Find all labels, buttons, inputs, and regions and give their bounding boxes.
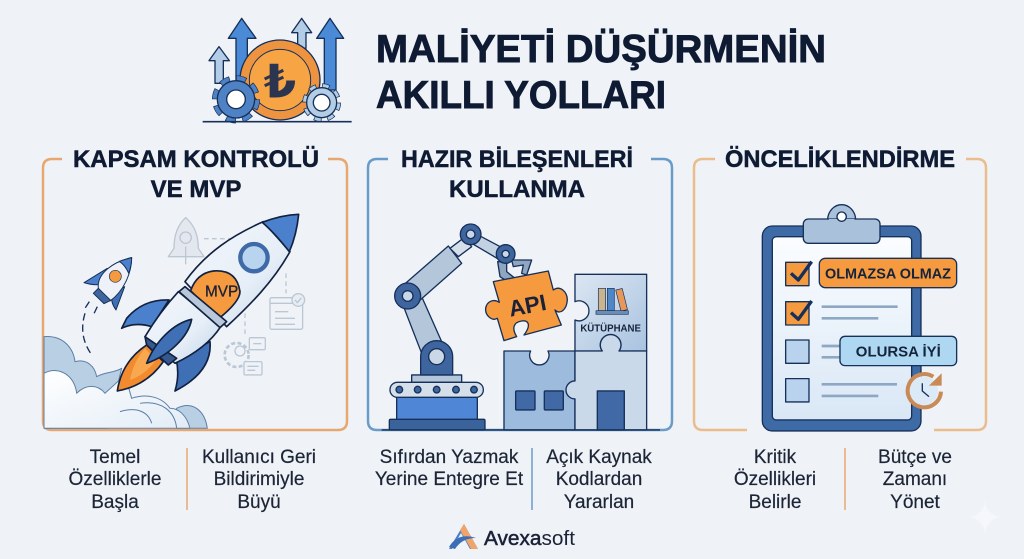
caption: butce ve zaman: Yönet bbox=[890, 492, 941, 513]
title: MALİYETİ DÜŞÜRMENİN bbox=[376, 28, 826, 71]
caption: acik kaynak: Açık Kaynak bbox=[546, 447, 652, 468]
illustration: robot arm and puzzle bbox=[382, 224, 660, 430]
badge: olursa iyi: OLURSA İYİ bbox=[856, 344, 941, 361]
icon: clouds bbox=[44, 337, 207, 428]
caption: temel ozellikler: Özelliklerle bbox=[69, 469, 161, 490]
title: AKILLI YOLLARI bbox=[376, 74, 666, 117]
caption: butce ve zaman: Zamanı bbox=[883, 469, 947, 490]
header icon: coin, gears and arrows: ₺ bbox=[264, 55, 296, 109]
icon: API puzzle piece: API bbox=[506, 289, 548, 322]
heading: kapsam: KAPSAM KONTROLÜ bbox=[73, 146, 319, 173]
illustration: rocket launch bbox=[44, 214, 305, 428]
icon: main rocket bbox=[117, 214, 299, 391]
heading: kapsam: VE MVP bbox=[151, 176, 241, 203]
caption: entegre et: Yerine Entegre Et bbox=[375, 469, 524, 490]
logo: avexasoft: Avexasoft bbox=[484, 528, 575, 550]
caption: entegre et: Sıfırdan Yazmak bbox=[380, 447, 519, 468]
caption: kritik ozellikler: Özellikleri bbox=[734, 469, 816, 490]
heading: hazir bilesenleri bbox=[401, 146, 633, 203]
icon: puzzle blocks bbox=[504, 274, 647, 430]
caption: kullanici geri bildirimi: Büyü bbox=[237, 492, 281, 513]
logo: avexasoft bbox=[449, 524, 575, 550]
icon: faint feature sketches bbox=[168, 218, 305, 375]
icon: empty boxes bbox=[786, 340, 809, 402]
icon: sparkle bbox=[969, 501, 1001, 533]
icon: clipboard clip bbox=[803, 205, 880, 243]
icon: API puzzle piece bbox=[486, 271, 567, 341]
caption: temel ozellikler: Temel bbox=[90, 447, 140, 468]
caption: acik kaynak: Kodlardan bbox=[556, 469, 642, 490]
label: kutuphane: KÜTÜPHANE bbox=[580, 323, 642, 334]
panel: onceliklendirme bbox=[694, 146, 986, 513]
icon: robot arm bbox=[389, 224, 532, 430]
caption: kritik ozellikler: Kritik bbox=[754, 447, 797, 468]
heading: onceliklendirme: ÖNCELİKLENDİRME bbox=[725, 146, 955, 173]
panel: hazir bilesenleri kullanma bbox=[368, 146, 672, 513]
caption: butce ve zaman: Bütçe ve bbox=[878, 447, 952, 468]
icon: checked boxes bbox=[786, 262, 812, 325]
icon: main rocket: MVP bbox=[205, 284, 238, 301]
caption: acik kaynak: Yararlan bbox=[564, 492, 634, 513]
caption: temel ozellikler: Başla bbox=[91, 492, 139, 513]
icon: clock bbox=[908, 373, 942, 407]
panel: kapsam kontrolu ve MVP bbox=[43, 146, 347, 513]
heading: hazir bilesenleri: HAZIR BİLEŞENLERİ bbox=[401, 146, 633, 173]
caption: kullanici geri bildirimi: Bildirimiyle bbox=[214, 469, 304, 490]
title bbox=[376, 28, 826, 117]
icon: small rocket bbox=[83, 258, 132, 353]
heading: kapsam bbox=[73, 146, 319, 203]
badge: olursa iyi bbox=[840, 336, 957, 366]
caption: kullanici geri bildirimi: Kullanıcı Geri bbox=[202, 447, 316, 468]
heading: hazir bilesenleri: KULLANMA bbox=[449, 176, 585, 203]
illustration: clipboard checklist bbox=[762, 205, 957, 431]
header icon: coin, gears and arrows bbox=[203, 18, 352, 122]
badge: olmazsa olmaz bbox=[819, 258, 957, 288]
text lines bbox=[822, 307, 898, 396]
icon: books bbox=[596, 288, 628, 314]
badge: olmazsa olmaz: OLMAZSA OLMAZ bbox=[825, 266, 951, 282]
caption: kritik ozellikler: Belirle bbox=[749, 492, 801, 513]
